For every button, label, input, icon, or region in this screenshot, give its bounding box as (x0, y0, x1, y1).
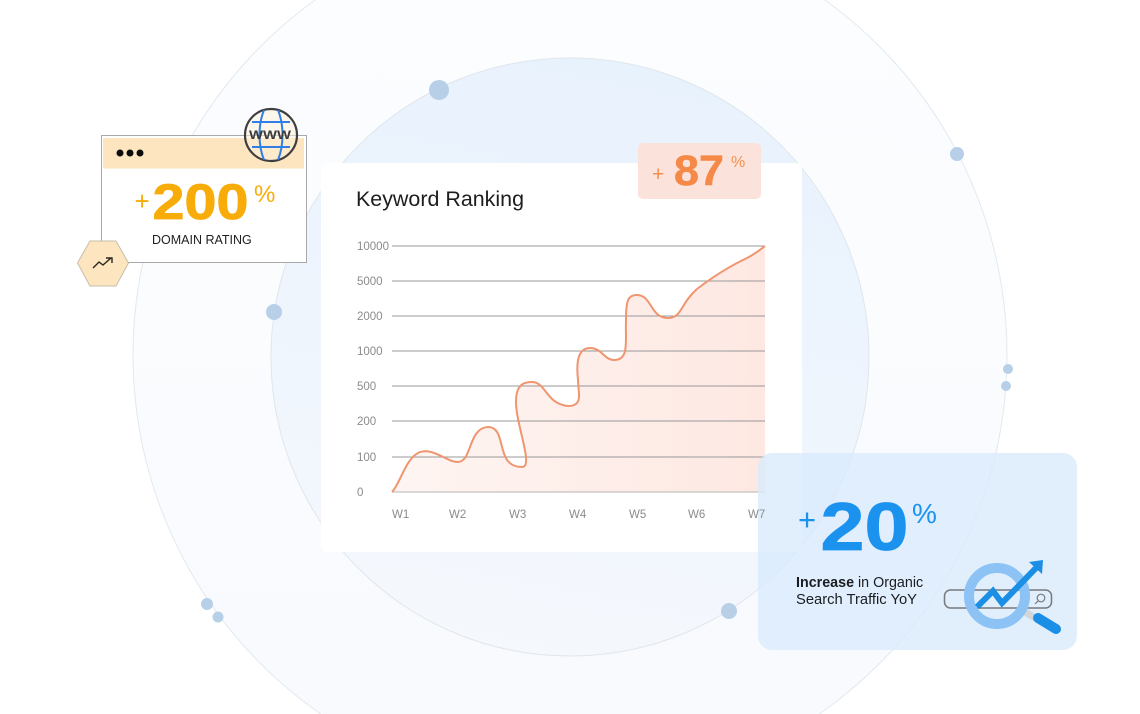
+200% stat: + (134, 186, 150, 216)
panel: keyword ranking chart (321, 163, 802, 552)
traffic description: Increase in Organic (796, 575, 923, 591)
+200% stat: 200 (152, 174, 248, 230)
x axis labels (392, 509, 705, 521)
browser bar (103, 138, 304, 168)
x axis labels: W4 (569, 509, 587, 521)
callout: +87% (638, 143, 761, 199)
traffic description (796, 575, 923, 608)
background circles (133, 0, 1007, 714)
y axis labels: 10000 (357, 241, 389, 253)
x axis labels: W2 (449, 509, 466, 521)
area chart (357, 241, 765, 521)
panel: organic traffic (748, 453, 1077, 650)
callout: +87%: + (652, 163, 664, 186)
x axis labels: W6 (688, 509, 705, 521)
icon: globe www (245, 109, 297, 161)
y axis labels: 500 (357, 381, 376, 393)
traffic description: Search Traffic YoY (796, 592, 917, 608)
decorative dots (201, 80, 1013, 622)
x axis labels: W1 (392, 509, 409, 521)
+20% stat (798, 489, 937, 565)
y axis labels: 5000 (357, 276, 383, 288)
icon: hexagon trend (78, 241, 128, 286)
callout: +87%: % (731, 154, 745, 171)
y axis labels: 100 (357, 452, 376, 464)
x axis label W7: W7 (748, 509, 765, 521)
y axis labels: 1000 (357, 346, 383, 358)
icon: globe www: WWW (249, 130, 291, 142)
curve line (392, 246, 765, 492)
+20% stat: + (798, 502, 816, 537)
browser dots (116, 150, 144, 156)
y axis labels: 200 (357, 416, 376, 428)
panel: domain rating (102, 136, 306, 262)
+20% stat: % (912, 498, 937, 529)
+200% stat: % (254, 181, 275, 208)
chart title: Keyword Ranking (356, 188, 524, 211)
gridlines (392, 246, 765, 492)
x axis labels: W3 (509, 509, 526, 521)
domain rating label: DOMAIN RATING (152, 233, 252, 247)
+20% stat: 20 (820, 489, 908, 565)
x axis labels: W5 (629, 509, 646, 521)
+200% stat (134, 174, 275, 230)
y axis labels: 2000 (357, 311, 383, 323)
area fill (392, 246, 765, 492)
callout: +87%: 87 (674, 147, 724, 195)
icon: search growth (944, 560, 1056, 629)
y axis labels: 0 (357, 487, 363, 499)
y axis labels (357, 241, 389, 499)
